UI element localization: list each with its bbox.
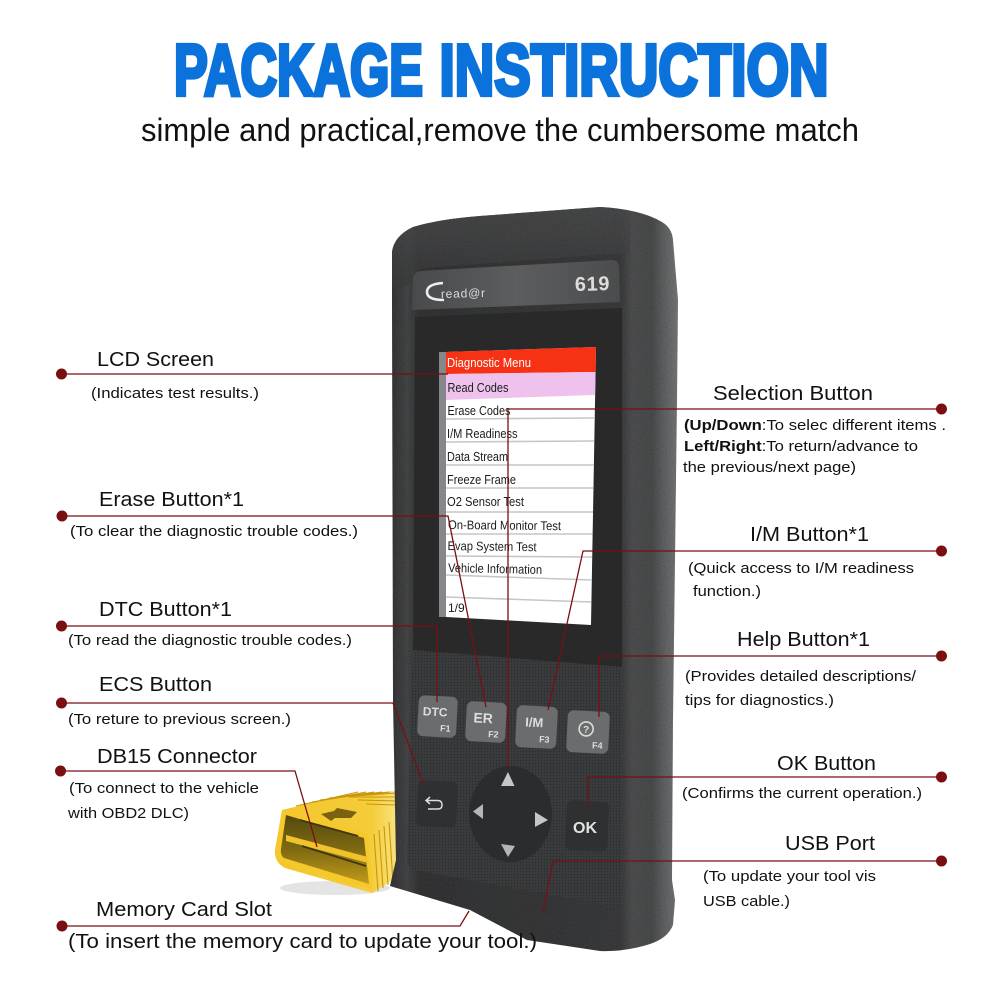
- callout: Selection Button: [683, 382, 946, 476]
- ER F2 button: ER: [473, 709, 493, 726]
- callout: DB15 Connector: (To connect to the vehicle: [69, 780, 259, 797]
- Help F4 button: ?: [583, 725, 589, 736]
- LCD display: Evap System Test: [447, 539, 537, 554]
- callout: Selection Button: the previous/next page): [683, 459, 856, 476]
- nameplate: [412, 260, 620, 310]
- LCD display: On-Board Monitor Test: [448, 518, 562, 533]
- callout: DB15 Connector: [67, 745, 259, 822]
- callout: DTC Button: [68, 598, 352, 649]
- callout: I/M Button: [688, 523, 914, 600]
- callout: OK Button: OK Button: [777, 752, 876, 775]
- callout: OK Button: [682, 752, 922, 802]
- LCD display: I/M Readiness: [447, 427, 518, 441]
- callout: LCD Screen: LCD Screen: [97, 348, 214, 371]
- callout: USB Port: (To update your tool vis: [703, 868, 876, 885]
- callout: USB Port: USB Port: [785, 832, 875, 855]
- callout: Help Button: (Provides detailed descriptions/: [685, 668, 917, 685]
- callout: Memory Card Slot: Memory Card Slot: [96, 898, 272, 921]
- black screen bezel: [413, 308, 622, 667]
- callout: Memory Card Slot: [68, 898, 537, 953]
- LCD display: [439, 347, 596, 625]
- callout: Help Button: tips for diagnostics.): [685, 692, 834, 709]
- device rubber housing: [390, 207, 678, 951]
- DTC F1 button: F1: [440, 723, 451, 734]
- Help F4 button: [566, 710, 610, 754]
- ER F2 button: F2: [488, 729, 499, 740]
- LCD display: Diagnostic Menu: [447, 356, 531, 370]
- LCD display: O2 Sensor Test: [447, 495, 524, 509]
- callout: ECS Button: ECS Button: [99, 673, 212, 696]
- callout: DB15 Connector: DB15 Connector: [97, 745, 257, 768]
- callout: ECS Button: (To reture to previous screen.): [68, 711, 291, 728]
- nameplate: read@r: [441, 286, 486, 301]
- callout: I/M Button: I/M Button*1: [750, 523, 869, 546]
- title: INSTIRUCTION: [440, 31, 828, 111]
- LCD display: Freeze Frame: [447, 473, 516, 487]
- title: PACKAGE: [174, 31, 423, 111]
- LCD display: Vehicle Information: [448, 561, 542, 577]
- back button: [416, 780, 458, 828]
- ER F2 button: [465, 701, 507, 743]
- top bumper: [392, 207, 630, 290]
- callout: Selection Button: Selection Button: [713, 382, 873, 405]
- callout: Help Button: Help Button*1: [737, 628, 870, 651]
- I/M F3 button: F3: [539, 734, 550, 745]
- OK button: [565, 800, 609, 852]
- callout: I/M Button: function.): [693, 583, 761, 600]
- LCD display: 1/9: [448, 601, 465, 615]
- LCD display: Data Stream: [447, 450, 508, 464]
- callout: Erase Button: Erase Button*1: [99, 488, 244, 511]
- callout: LCD Screen: (Indicates test results.): [91, 385, 259, 402]
- I/M F3 button: I/M: [525, 714, 544, 730]
- callout: I/M Button: (Quick access to I/M readiness: [688, 560, 914, 577]
- leader dots: [55, 368, 947, 932]
- callout: Memory Card Slot: (To insert the memory card to update your tool.): [68, 930, 537, 953]
- DTC F1 button: [417, 695, 458, 738]
- title: [174, 31, 828, 111]
- callout: Erase Button: (To clear the diagnostic trouble codes.): [70, 523, 358, 540]
- OK button: OK: [573, 820, 597, 837]
- callout: Help Button: [685, 628, 917, 709]
- Help F4 button: F4: [592, 740, 603, 751]
- callout: DTC Button: DTC Button*1: [99, 598, 232, 621]
- callout: DB15 Connector: with OBD2 DLC): [67, 805, 189, 822]
- icon: yellow OBD2 connector: [275, 791, 396, 895]
- callout: USB Port: USB cable.): [703, 893, 790, 910]
- leader lines: [60, 374, 941, 926]
- I/M F3 button: [515, 705, 558, 749]
- DTC F1 button: DTC: [423, 704, 448, 720]
- keypad panel: [407, 650, 622, 906]
- LCD display: Erase Codes: [448, 404, 510, 418]
- callout: Selection Button: (Up/Down :To selec different items .: [684, 417, 946, 434]
- subtitle: simple and practical,remove the cumbersome match: [141, 112, 859, 148]
- direction pad: [469, 766, 552, 862]
- callout: Erase Button: [70, 488, 358, 540]
- callout: LCD Screen: [91, 348, 259, 402]
- device: Creader 619 scan tool: [390, 207, 678, 951]
- callout: ECS Button: [68, 673, 291, 728]
- nameplate: 619: [575, 273, 610, 296]
- callout: USB Port: [703, 832, 876, 910]
- callout: Selection Button: Left/Right :To return/advance to: [684, 438, 918, 455]
- LCD display: Read Codes: [448, 381, 508, 395]
- callout: DTC Button: (To read the diagnostic trouble codes.): [68, 632, 352, 649]
- callout: OK Button: (Confirms the current operation.): [682, 785, 922, 802]
